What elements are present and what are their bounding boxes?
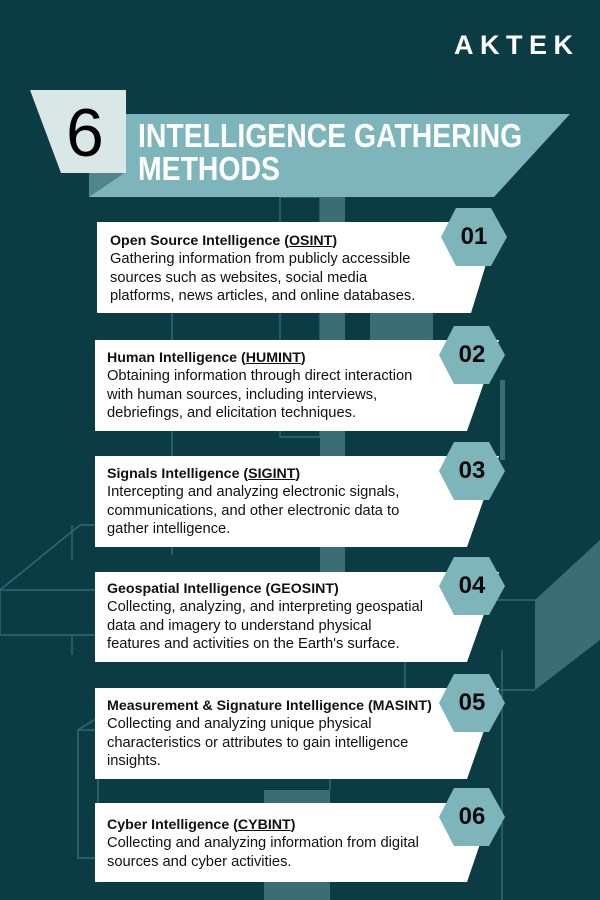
card 5: MASINT xyxy=(107,698,432,769)
card 1: OSINT xyxy=(110,233,415,304)
card 1: OSINT: sources such as websites, social media xyxy=(110,270,367,286)
card 4: GEOSINT: Collecting, analyzing, and interpreting geospatial xyxy=(107,599,423,615)
card 2: HUMINT xyxy=(107,350,412,421)
title banner xyxy=(30,90,570,197)
title text: METHODS xyxy=(138,150,280,187)
card 6: CYBINT: Collecting and analyzing information from digital xyxy=(107,835,419,851)
card 5: MASINT: Measurement & Signature Intelligence (MASINT) xyxy=(107,698,432,714)
card 4: GEOSINT: Geospatial Intelligence (GEOSINT) xyxy=(107,581,339,597)
card 2: HUMINT: Human Intelligence (HUMINT) xyxy=(107,350,306,366)
title number 6: 6 xyxy=(66,95,104,171)
card 4: GEOSINT: data and imagery to understand physical xyxy=(107,618,372,634)
card 3: SIGINT: Signals Intelligence (SIGINT) xyxy=(107,466,300,482)
card 1: OSINT: Open Source Intelligence (OSINT) xyxy=(110,233,337,249)
card 3: SIGINT: gather intelligence. xyxy=(107,521,230,537)
card 4: GEOSINT: features and activities on the Earth's surface. xyxy=(107,636,400,652)
card 6: CYBINT xyxy=(107,817,419,870)
card 2: HUMINT: with human sources, including interviews, xyxy=(107,387,377,403)
card 6: CYBINT: Cyber Intelligence (CYBINT) xyxy=(107,817,295,833)
number 03: 03 xyxy=(459,457,485,484)
card 5: MASINT: insights. xyxy=(107,753,161,769)
card 2: HUMINT: Obtaining information through direct interaction xyxy=(107,368,412,384)
card 3: SIGINT: communications, and other electronic data to xyxy=(107,503,399,519)
number 01: 01 xyxy=(461,223,487,250)
card 5: MASINT: characteristics or attributes to gain intelligence xyxy=(107,735,408,751)
number 02: 02 xyxy=(459,341,485,368)
card 6: CYBINT: sources and cyber activities. xyxy=(107,854,292,870)
title text xyxy=(138,117,522,187)
card 2: HUMINT: debriefings, and elicitation techniques. xyxy=(107,405,356,421)
number 04: 04 xyxy=(459,572,485,599)
number 05: 05 xyxy=(459,689,485,716)
title text: INTELLIGENCE GATHERING xyxy=(138,117,522,154)
card 3: SIGINT xyxy=(107,466,399,537)
number 06: 06 xyxy=(459,803,485,830)
card 5: MASINT: Collecting and analyzing unique physical xyxy=(107,716,372,732)
card 4: GEOSINT xyxy=(107,581,423,652)
card 3: SIGINT: Intercepting and analyzing electronic signals, xyxy=(107,484,399,500)
card 1: OSINT: Gathering information from publicly accessible xyxy=(110,251,410,267)
logo: AKTEK: AKTEK xyxy=(454,30,580,60)
card 1: OSINT: platforms, news articles, and online databases. xyxy=(110,288,415,304)
